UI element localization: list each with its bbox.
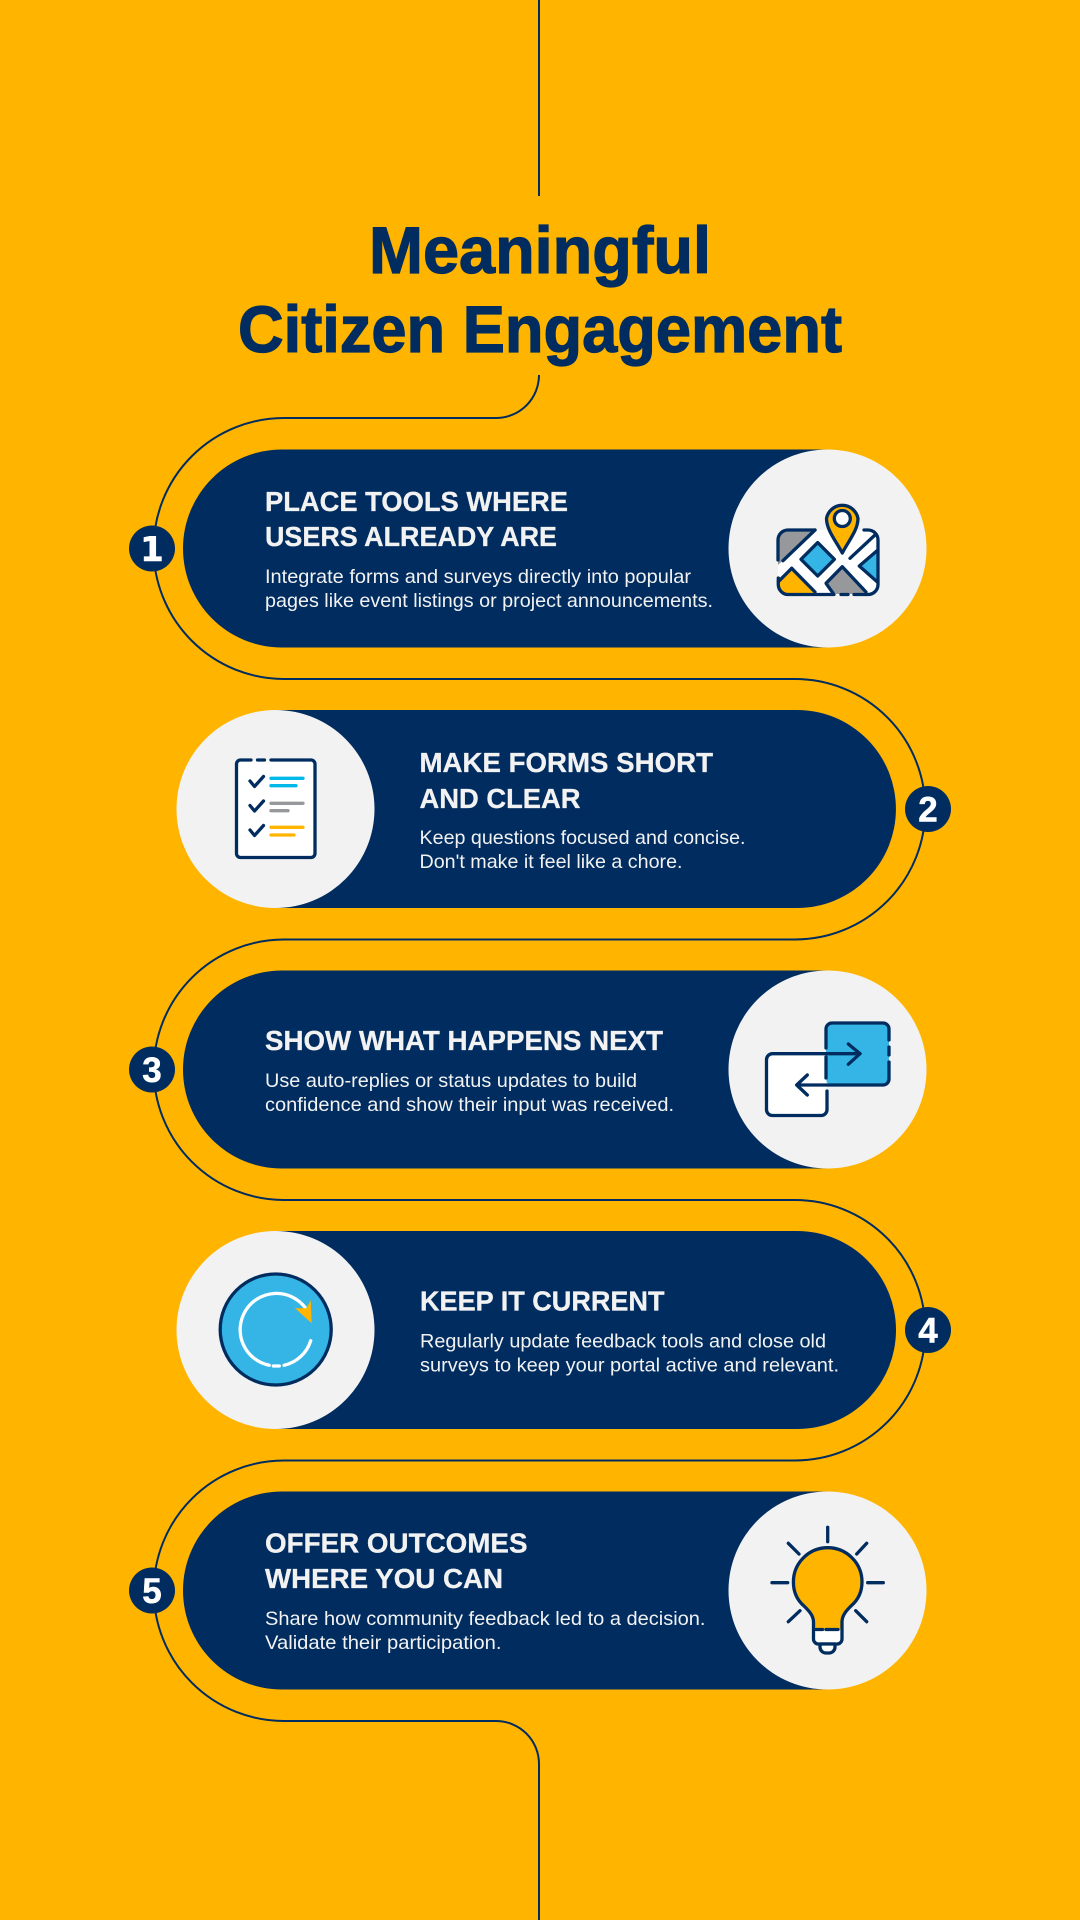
number badge 3: 3	[142, 1051, 162, 1090]
heading 1: USERS ALREADY ARE	[265, 521, 557, 552]
pill background 5	[183, 1492, 828, 1690]
icon: checklist	[236, 760, 315, 858]
number badge 5: 5	[142, 1572, 162, 1611]
panel: step 3 what happens next	[129, 970, 926, 1168]
icon circle 3	[728, 970, 926, 1168]
body text 3	[265, 1070, 674, 1116]
number badge 5	[129, 1568, 175, 1614]
heading 5: WHERE YOU CAN	[265, 1563, 503, 1594]
body text 1	[265, 566, 713, 612]
body text 4	[420, 1330, 839, 1376]
pill background 4	[275, 1231, 896, 1429]
icon circle 5	[728, 1492, 926, 1690]
icon: light bulb	[772, 1527, 883, 1653]
number badge 2: 2	[918, 790, 938, 830]
heading 5: OFFER OUTCOMES	[265, 1528, 528, 1559]
title	[238, 213, 842, 366]
connector line: winding path through steps	[154, 375, 925, 1920]
title: Meaningful	[369, 213, 711, 287]
panel: step 5 offer outcomes	[129, 1492, 926, 1690]
number badge 1	[129, 526, 175, 572]
panel: step 2 short forms	[176, 710, 951, 908]
panel: step 1 place tools	[129, 450, 926, 648]
heading 5	[265, 1528, 528, 1594]
body text 3: Use auto-replies or status updates to build	[265, 1070, 637, 1092]
number badge 4	[905, 1307, 951, 1353]
heading 1: PLACE TOOLS WHERE	[265, 486, 568, 517]
heading 3: SHOW WHAT HAPPENS NEXT	[265, 1025, 663, 1056]
body text 5: Validate their participation.	[265, 1632, 502, 1654]
icon: map with pin	[778, 505, 878, 595]
pill background 2	[275, 710, 896, 908]
number badge 1: 1	[140, 530, 164, 570]
heading 2: MAKE FORMS SHORT	[420, 747, 713, 778]
number badge 4: 4	[918, 1312, 938, 1350]
icon circle 4	[176, 1231, 374, 1429]
heading 2	[420, 747, 713, 814]
pill background 3	[183, 970, 828, 1168]
number badge 2	[905, 786, 951, 832]
icon: refresh cycle	[220, 1274, 331, 1385]
body text 1: Integrate forms and surveys directly into popular	[265, 566, 692, 588]
body text 4: surveys to keep your portal active and relevant.	[420, 1354, 839, 1376]
body text 2: Keep questions focused and concise.	[420, 827, 746, 849]
body text 5: Share how community feedback led to a decision.	[265, 1608, 706, 1630]
body text 2	[420, 827, 746, 873]
body text 5	[265, 1608, 706, 1654]
heading 1	[265, 486, 568, 552]
heading 4: KEEP IT CURRENT	[420, 1286, 664, 1316]
body text 3: confidence and show their input was received.	[265, 1094, 674, 1116]
body text 1: pages like event listings or project announcements.	[265, 590, 713, 612]
number badge 3	[129, 1046, 175, 1092]
body text 2: Don't make it feel like a chore.	[420, 851, 682, 873]
icon circle 2	[176, 710, 374, 908]
body text 4: Regularly update feedback tools and close old	[420, 1330, 826, 1352]
icon circle 1	[728, 450, 926, 648]
pill background 1	[183, 450, 828, 648]
heading 2: AND CLEAR	[420, 783, 580, 814]
connector line: top segment	[538, 0, 540, 196]
icon: exchange arrows	[766, 1023, 889, 1116]
title: Citizen Engagement	[238, 292, 842, 366]
panel: step 4 keep it current	[176, 1231, 951, 1429]
